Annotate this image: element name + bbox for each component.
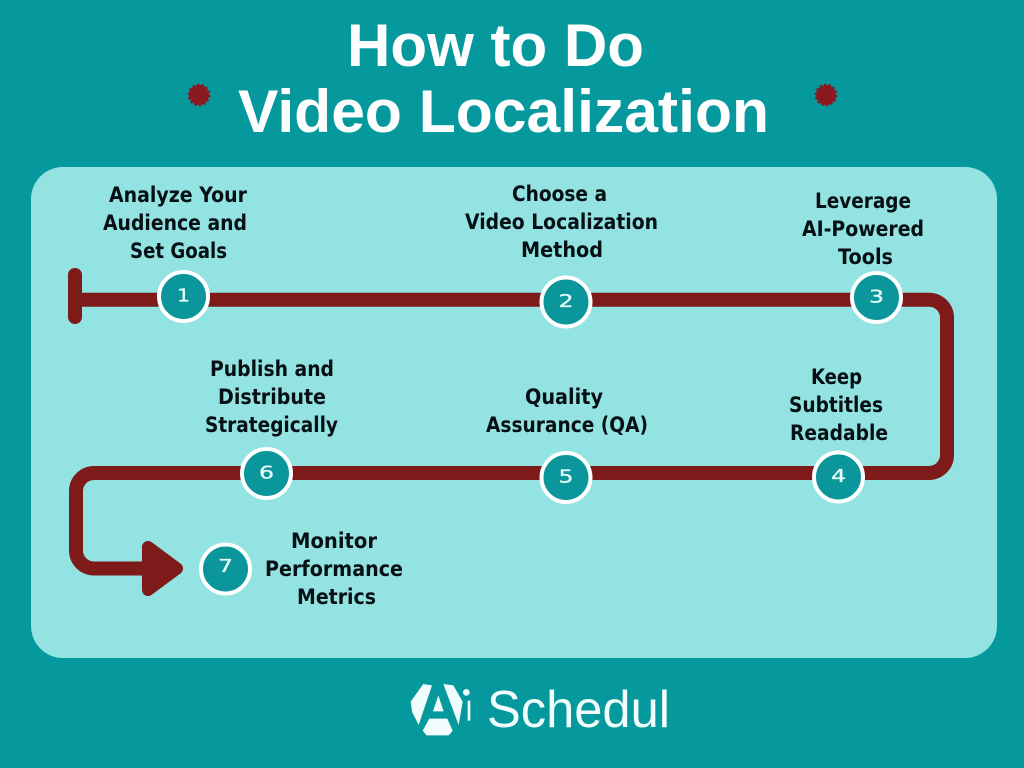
step 1 [103, 183, 248, 321]
step 2 [465, 182, 658, 326]
step 3 label: Leverage [815, 189, 911, 213]
step 4 label: Keep [811, 365, 862, 389]
step 6 label [205, 357, 338, 437]
step 2 label [465, 182, 658, 262]
step 1 label: Analyze Your [109, 183, 248, 207]
step 1 label: Set Goals [130, 239, 227, 263]
step 1 badge: 1 [177, 286, 190, 306]
step 6 label: Distribute [218, 385, 326, 409]
logo wordmark: Schedul [487, 681, 670, 739]
panel: process timeline [31, 167, 997, 658]
step 5 [486, 385, 648, 502]
step 7 label: Monitor [291, 529, 378, 553]
step 2 label: Choose a [512, 182, 607, 206]
step 3 badge: 3 [869, 286, 884, 308]
step 2 label: Video Localization [465, 210, 658, 234]
step 5 badge: 5 [558, 466, 574, 488]
step 5 badge [542, 453, 590, 502]
step 3 [802, 189, 924, 322]
step 7 label: Performance [265, 557, 403, 581]
step 5 label [486, 385, 648, 437]
timeline path with arrow [75, 275, 947, 590]
icon: left star [189, 85, 209, 105]
title: How to Do [347, 12, 644, 79]
step 1 label: Audience and [103, 211, 247, 235]
step 2 badge [542, 278, 590, 326]
step 6 label: Publish and [210, 357, 334, 381]
step 1 label [103, 183, 248, 263]
step 2 label: Method [521, 238, 603, 262]
title: Video Localization [238, 78, 769, 145]
step 4 label: Readable [790, 421, 888, 445]
step 6 badge: 6 [259, 462, 274, 484]
icon: logo mark [411, 684, 470, 735]
step 4 label [789, 365, 888, 445]
title [238, 12, 769, 145]
step 1 badge [159, 272, 208, 321]
step 3 label: AI-Powered [802, 217, 924, 241]
step 4 badge: 4 [831, 466, 846, 487]
step 4 label: Subtitles [789, 393, 883, 417]
step 3 label [802, 189, 924, 269]
step 7 label: Metrics [297, 585, 376, 609]
step 5 label: Quality [525, 385, 603, 409]
step 4 [789, 365, 888, 502]
step 7 label [265, 529, 403, 609]
step 3 label: Tools [838, 245, 893, 269]
step 7 badge [201, 544, 250, 594]
step 6 label: Strategically [205, 413, 338, 437]
step 7 [201, 529, 403, 609]
step 2 badge: 2 [558, 291, 574, 312]
step 5 label: Assurance (QA) [486, 413, 648, 437]
step 7 badge: 7 [218, 556, 233, 577]
step 6 [205, 357, 338, 498]
step 6 badge [242, 449, 291, 498]
logo: Ai Schedul [411, 681, 670, 739]
icon: right star [816, 85, 836, 105]
